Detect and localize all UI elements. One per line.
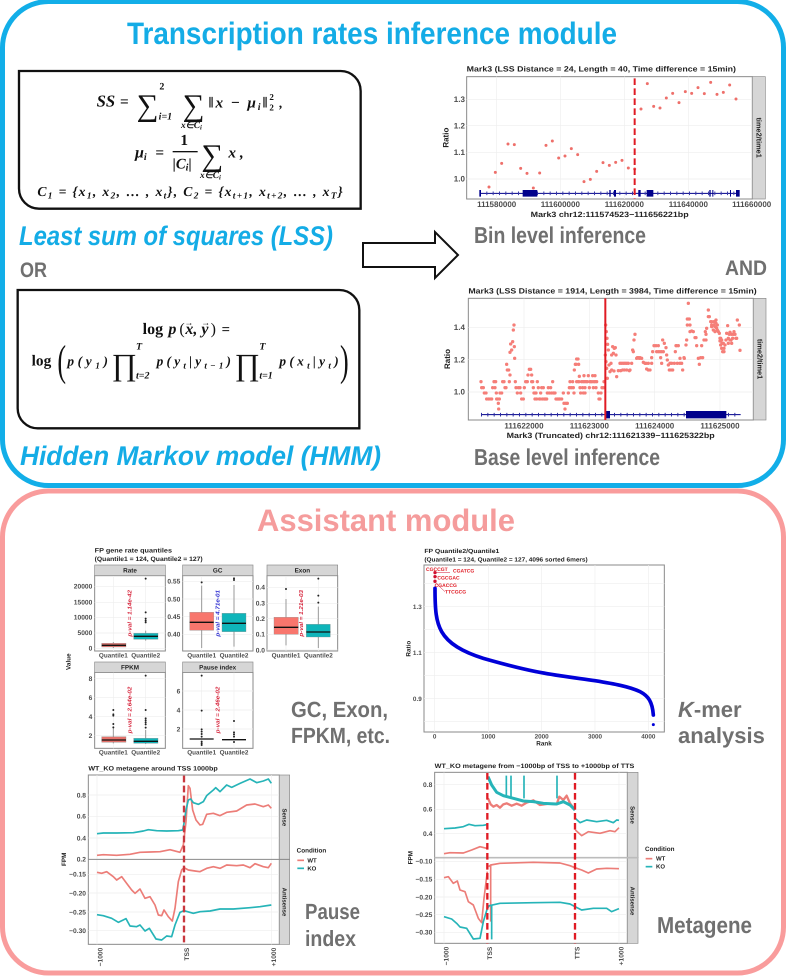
chart: k-mer rank curve: Ratio bbox=[405, 641, 412, 657]
chart: metagene TSS to TTS: 0.8 bbox=[423, 781, 432, 789]
heading: assistant module: Assistant module bbox=[257, 503, 515, 538]
formula box: least sum of squares: 2 bbox=[159, 81, 164, 92]
formula box: least sum of squares: t+2 bbox=[267, 191, 282, 201]
formula box: least sum of squares: C bbox=[37, 184, 46, 199]
formula box: hidden markov model: ) bbox=[333, 354, 339, 369]
formula box: least sum of squares: | bbox=[188, 155, 192, 172]
chart: k-mer rank curve: 1.1 bbox=[413, 650, 422, 657]
formula box: least sum of squares: = {x bbox=[200, 184, 231, 199]
facet: exon: 0.0 bbox=[256, 647, 265, 654]
formula box: least sum of squares: 2 bbox=[193, 191, 198, 201]
formula box: hidden markov model: ( bbox=[179, 320, 185, 338]
chart: metagene around TSS: Antisense bbox=[281, 888, 288, 916]
formula box: least sum of squares: ∑ bbox=[137, 88, 159, 122]
formula box: least sum of squares bbox=[19, 71, 361, 209]
facet: rate: Quantile2 bbox=[131, 652, 160, 659]
legend: condition: Condition bbox=[297, 847, 326, 854]
legend: condition: WT bbox=[656, 855, 665, 862]
facet: GC: 0.40 bbox=[167, 631, 180, 638]
formula box: hidden markov model: T bbox=[259, 341, 266, 352]
formula box: hidden markov model: |y bbox=[313, 354, 325, 369]
facet: exon: Quantile2 bbox=[304, 652, 333, 659]
chart: bin level inference: 111580000 bbox=[477, 200, 516, 209]
label: GC, Exon, FPKM: FPKM, etc. bbox=[291, 723, 390, 748]
formula box: hidden markov model: ∏ bbox=[235, 348, 260, 382]
chart: metagene around TSS: −0.15 bbox=[69, 871, 86, 878]
formula box: least sum of squares: ∑ bbox=[201, 138, 223, 172]
chart: metagene TSS to TTS: +1000 bbox=[618, 947, 625, 965]
facet: rate: 0 bbox=[89, 645, 92, 652]
chart: bin level inference: 1.2 bbox=[454, 121, 465, 130]
formula box: least sum of squares: μ bbox=[135, 143, 144, 161]
chart: metagene TSS to TTS: FPM bbox=[407, 851, 414, 864]
chart: base level inference: time2/time1 bbox=[756, 339, 764, 379]
formula box: hidden markov model: ( bbox=[57, 337, 66, 385]
chart: base level inference: Ratio bbox=[443, 349, 452, 369]
formula box: hidden markov model: p(y bbox=[67, 354, 92, 369]
formula box: least sum of squares: ∑ bbox=[183, 88, 205, 122]
formula box: hidden markov model: |y bbox=[189, 354, 201, 369]
legend: condition bbox=[645, 846, 675, 870]
formula box: least sum of squares: ‖ bbox=[262, 94, 268, 111]
formula box: least sum of squares: 1 bbox=[48, 191, 52, 201]
facet: pause index: 2 bbox=[177, 726, 180, 733]
heading: transcription module: Transcription rates inference module bbox=[127, 16, 617, 51]
chart: k-mer rank curve: 1.3 bbox=[413, 604, 422, 611]
facet: FPKM bbox=[89, 662, 165, 756]
formula box: least sum of squares: } bbox=[337, 184, 343, 199]
label: pause index: Pause bbox=[305, 899, 360, 924]
chart: base level inference: Mark3 (Truncated) chr12:111621339−111625322bp bbox=[507, 431, 715, 440]
formula box: least sum of squares: t bbox=[164, 191, 167, 201]
chart: metagene around TSS bbox=[61, 765, 326, 966]
formula box: hidden markov model: t−1 bbox=[204, 360, 223, 370]
chart: FP gene rate quantile boxplots: Value bbox=[65, 653, 72, 670]
label: metagene: Metagene bbox=[657, 912, 752, 938]
formula box: least sum of squares: = {x bbox=[54, 184, 85, 199]
chart: k-mer rank curve: CGACCG bbox=[435, 583, 457, 588]
formula box: hidden markov model bbox=[18, 290, 359, 428]
formula box: least sum of squares: = bbox=[120, 93, 129, 110]
formula box: least sum of squares: 2 bbox=[110, 191, 115, 201]
formula box: hidden markov model: ∏ bbox=[112, 348, 137, 382]
chart: bin level inference: 1.3 bbox=[454, 95, 465, 104]
facet: pause index: Quantile1 bbox=[187, 749, 216, 756]
formula box: least sum of squares: , bbox=[279, 95, 283, 110]
formula box: hidden markov model: log bbox=[143, 320, 163, 338]
formula box: hidden markov model: t=2 bbox=[136, 370, 149, 381]
formula box: least sum of squares: i bbox=[186, 162, 189, 173]
chart: metagene around TSS: 0.6 bbox=[77, 813, 86, 820]
formula box: hidden markov model: = bbox=[222, 321, 230, 337]
facet: rate: p-val = 1.14e-42 bbox=[127, 590, 133, 637]
facet: FPKM: FPKM bbox=[121, 664, 139, 671]
chart: bin level inference: 111640000 bbox=[669, 200, 708, 209]
chart: metagene TSS to TTS: −0.30 bbox=[415, 929, 432, 936]
label: GC, Exon, FPKM: GC, Exon, bbox=[291, 697, 388, 722]
formula box: least sum of squares: x∈C bbox=[181, 120, 200, 130]
chart: base level inference: 111623000 bbox=[570, 421, 609, 430]
facet: exon bbox=[256, 565, 338, 659]
facet: exon: Exon bbox=[295, 567, 310, 574]
formula box: hidden markov model: 1 bbox=[95, 360, 100, 370]
chart: metagene TSS to TTS: −0.25 bbox=[415, 911, 432, 919]
chart: k-mer rank curve bbox=[405, 548, 664, 747]
facet: exon: Quantile1 bbox=[272, 652, 301, 659]
chart: bin level inference: 1.1 bbox=[454, 148, 465, 157]
facet: rate: 10000 bbox=[74, 614, 92, 621]
formula box: hidden markov model: t bbox=[307, 360, 310, 370]
chart: k-mer rank curve: 4000 bbox=[641, 733, 655, 740]
arrow: formulas to inference bbox=[363, 232, 458, 278]
facet: GC: GC bbox=[213, 567, 223, 574]
formula box: least sum of squares: 2 bbox=[269, 102, 274, 112]
chart: metagene TSS to TTS: Antisense bbox=[629, 887, 636, 915]
label: k-mer analysis: K bbox=[678, 697, 696, 722]
chart: metagene around TSS: +1000 bbox=[270, 948, 278, 966]
chart: metagene around TSS: −0.25 bbox=[69, 909, 86, 916]
chart: bin level inference: 111600000 bbox=[541, 200, 580, 209]
formula box: hidden markov model: p bbox=[167, 320, 176, 338]
facet: exon: 0.2 bbox=[256, 615, 265, 623]
formula box: hidden markov model: T bbox=[136, 341, 143, 352]
chart: metagene around TSS: WT_KO metagene around TSS 1000bp bbox=[88, 765, 218, 772]
chart: metagene around TSS: −0.30 bbox=[69, 927, 86, 935]
formula box: least sum of squares: 2 bbox=[269, 92, 274, 102]
formula box: least sum of squares: = bbox=[155, 144, 164, 161]
formula box: least sum of squares: x∈C bbox=[200, 170, 219, 180]
chart: metagene around TSS: 0.2 bbox=[77, 856, 86, 863]
formula box: hidden markov model: t=1 bbox=[259, 370, 273, 381]
facet: GC: 0.55 bbox=[167, 578, 180, 585]
formula box: hidden markov model: ) bbox=[211, 320, 216, 338]
chart: k-mer rank curve: 0.9 bbox=[413, 696, 422, 703]
formula box: least sum of squares: 1 bbox=[87, 191, 91, 201]
chart: bin level inference: 1.0 bbox=[454, 175, 465, 184]
facet: rate: 15000 bbox=[74, 599, 92, 606]
chart: k-mer rank curve: FP Quantile2/Quantile1 bbox=[424, 548, 499, 554]
chart: base level inference: 111624000 bbox=[635, 421, 674, 430]
chart: k-mer rank curve: CGCGAC bbox=[437, 575, 460, 581]
formula box: hidden markov model: → bbox=[201, 318, 210, 327]
facet: pause index bbox=[177, 662, 253, 756]
chart: k-mer rank curve: TTCGCG bbox=[445, 589, 466, 595]
facet: FPKM: Quantile2 bbox=[131, 749, 160, 756]
label: bin level inference: Bin level inference bbox=[474, 222, 646, 248]
formula box: least sum of squares: }, C bbox=[167, 184, 193, 199]
formula box: least sum of squares: , … , x bbox=[283, 184, 329, 199]
chart: metagene TSS to TTS bbox=[407, 763, 675, 965]
chart: metagene around TSS: −0.20 bbox=[69, 890, 86, 897]
facet: rate: 20000 bbox=[74, 583, 92, 590]
label: k-mer analysis: -mer bbox=[694, 697, 742, 722]
facet: GC: Quantile2 bbox=[220, 652, 248, 659]
facet: pause index: p-val = 2.46e-02 bbox=[215, 686, 221, 734]
formula box: least sum of squares: i bbox=[200, 124, 202, 131]
chart: FP gene rate quantile boxplots bbox=[65, 547, 338, 756]
formula box: hidden markov model: log bbox=[32, 352, 51, 369]
chart: bin level inference: Ratio bbox=[442, 128, 451, 148]
formula box: least sum of squares: i bbox=[219, 174, 221, 181]
chart: k-mer rank curve: 1000 bbox=[481, 733, 495, 740]
legend: condition: WT bbox=[307, 857, 317, 864]
facet: GC: 0.45 bbox=[167, 613, 180, 621]
formula box: least sum of squares: T bbox=[331, 191, 337, 201]
facet: GC: Quantile1 bbox=[187, 652, 216, 659]
chart: k-mer rank curve: CGATCG bbox=[453, 568, 474, 574]
label: hidden markov model: Hidden Markov model (HMM) bbox=[20, 441, 381, 471]
chart: metagene TSS to TTS: −0.15 bbox=[415, 876, 432, 883]
formula box: least sum of squares: , … , x bbox=[116, 184, 162, 199]
formula box: least sum of squares: t+1 bbox=[233, 191, 248, 201]
facet: FPKM: p-val = 2.64e-02 bbox=[127, 686, 133, 734]
legend: condition: KO bbox=[656, 863, 665, 870]
chart: bin level inference bbox=[442, 65, 771, 219]
chart: FP gene rate quantile boxplots: FP gene rate quantiles bbox=[95, 547, 172, 554]
chart: metagene around TSS: FPM bbox=[61, 853, 68, 866]
chart: metagene around TSS: Sense bbox=[281, 808, 288, 826]
chart: metagene TSS to TTS: −0.10 bbox=[415, 858, 432, 865]
legend: condition: KO bbox=[307, 865, 316, 872]
chart: base level inference: 1.2 bbox=[454, 355, 465, 364]
chart: k-mer rank curve: CGCCGT bbox=[426, 567, 448, 572]
formula box: hidden markov model: ) bbox=[340, 337, 349, 385]
chart: metagene around TSS: TSS bbox=[183, 948, 191, 961]
chart: metagene TSS to TTS: TSS bbox=[486, 947, 494, 960]
chart: bin level inference: time2/time1 bbox=[755, 117, 763, 158]
formula box: hidden markov model: p(x bbox=[279, 354, 304, 369]
label: or: OR bbox=[20, 259, 47, 282]
facet: exon: 0.4 bbox=[256, 584, 265, 591]
chart: metagene TSS to TTS: −1000 bbox=[443, 947, 450, 965]
chart: k-mer rank curve: 3000 bbox=[588, 733, 602, 740]
panel: assistant module bbox=[2, 491, 784, 973]
facet: GC bbox=[167, 565, 253, 659]
chart: base level inference: Mark3 (LSS Distance = 1914, Length = 3984, Time difference = 15min) bbox=[468, 286, 757, 295]
facet: rate: 5000 bbox=[77, 629, 92, 637]
formula box: least sum of squares: i bbox=[144, 151, 147, 162]
chart: metagene around TSS: 0.4 bbox=[77, 835, 86, 842]
chart: bin level inference: 111620000 bbox=[605, 200, 644, 209]
facet: FPKM: Quantile1 bbox=[99, 749, 128, 756]
chart: metagene TSS to TTS: WT_KO metagene from −1000bp of TSS to +1000bp of TTS bbox=[435, 763, 634, 770]
formula box: hidden markov model: ) bbox=[103, 354, 108, 369]
legend: condition: Condition bbox=[645, 846, 675, 853]
chart: metagene TSS to TTS: 0.6 bbox=[423, 806, 432, 813]
chart: metagene around TSS: −1000 bbox=[97, 948, 104, 966]
facet: pause index: Pause index bbox=[199, 664, 236, 671]
label: k-mer analysis: analysis bbox=[678, 723, 765, 748]
facet: FPKM: 2 bbox=[89, 732, 92, 740]
label: least sum of squares: Least sum of squares (LSS) bbox=[19, 221, 333, 251]
label: base level inference: Base level inference bbox=[474, 444, 660, 470]
facet: exon: 0.1 bbox=[256, 631, 265, 638]
chart: k-mer rank curve: 2000 bbox=[535, 733, 549, 740]
chart: k-mer rank curve: (Quantile1 = 124, Quantile2 = 127, 4096 sorted 6mers) bbox=[424, 556, 588, 563]
formula box: hidden markov model: t bbox=[328, 360, 331, 370]
formula box: least sum of squares: ‖x − μ bbox=[208, 94, 256, 111]
facet: FPKM: 6 bbox=[89, 694, 92, 702]
chart: FP gene rate quantile boxplots: (Quantile1 = 124, Quantile2 = 127) bbox=[95, 556, 203, 563]
chart: metagene TSS to TTS: Sense bbox=[629, 806, 636, 824]
facet: pause index: Quantile2 bbox=[220, 749, 248, 756]
chart: k-mer rank curve: Rank bbox=[536, 740, 552, 747]
chart: base level inference: 111622000 bbox=[504, 421, 544, 430]
facet: FPKM: 8 bbox=[89, 675, 92, 683]
facet: GC: p-val = 4.71e-01 bbox=[215, 590, 221, 637]
formula box: hidden markov model: ) bbox=[226, 354, 231, 369]
chart: metagene around TSS: 0.8 bbox=[77, 792, 86, 799]
formula box: least sum of squares: 1 bbox=[180, 131, 188, 148]
facet: pause index: 6 bbox=[177, 688, 180, 695]
label: pause index: index bbox=[305, 926, 357, 951]
chart: base level inference bbox=[443, 286, 766, 440]
formula box: least sum of squares: i=1 bbox=[159, 111, 172, 122]
formula box: least sum of squares: , x bbox=[93, 184, 109, 199]
facet: rate: Quantile1 bbox=[99, 652, 128, 659]
chart: metagene TSS to TTS: TTS bbox=[574, 947, 581, 959]
chart: bin level inference: Mark3 chr12:111574523−111656221bp bbox=[531, 210, 689, 219]
chart: base level inference: 1.0 bbox=[454, 388, 465, 397]
chart: base level inference: 111625000 bbox=[700, 421, 740, 430]
facet: pause index: 4 bbox=[177, 707, 181, 714]
formula box: hidden markov model: t bbox=[183, 360, 186, 370]
chart: metagene TSS to TTS: −0.20 bbox=[415, 894, 432, 901]
formula box: least sum of squares: SS bbox=[97, 92, 115, 110]
formula box: least sum of squares: i bbox=[258, 101, 261, 112]
panel: transcription rates inference module bbox=[2, 2, 784, 486]
facet: FPKM: 4 bbox=[89, 713, 93, 721]
facet: rate: Rate bbox=[123, 567, 137, 574]
formula box: least sum of squares: , x bbox=[249, 184, 266, 199]
legend: condition bbox=[297, 847, 326, 872]
facet: GC: 0.50 bbox=[167, 596, 180, 603]
formula box: least sum of squares: x , bbox=[228, 144, 244, 161]
facet: exon: p-val = 1.21e-03 bbox=[298, 590, 304, 637]
formula box: hidden markov model: p(y bbox=[157, 354, 180, 369]
chart: bin level inference: 111660000 bbox=[732, 200, 771, 209]
chart: base level inference: 1.4 bbox=[454, 323, 465, 332]
chart: k-mer rank curve: 0 bbox=[433, 733, 436, 740]
facet: rate bbox=[74, 565, 165, 659]
formula box: hidden markov model: → bbox=[185, 318, 193, 327]
formula box: least sum of squares: |C bbox=[173, 155, 186, 172]
facet: exon: 0.3 bbox=[256, 600, 265, 607]
chart: metagene TSS to TTS: 0.4 bbox=[423, 830, 433, 838]
label: and: AND bbox=[725, 257, 767, 280]
chart: bin level inference: Mark3 (LSS Distance = 24, Length = 40, Time difference = 15min) bbox=[467, 65, 736, 73]
formula box: hidden markov model: x, y bbox=[185, 320, 209, 338]
